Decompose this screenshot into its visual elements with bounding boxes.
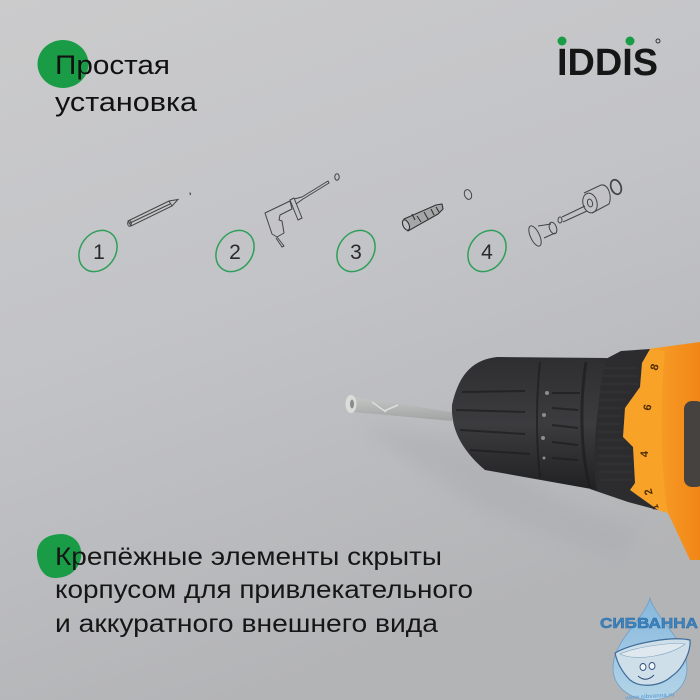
- title: [38, 40, 198, 117]
- chuck grooves: [456, 362, 590, 488]
- icon: wall plug: [401, 204, 443, 231]
- dial numbers: 2: [643, 487, 656, 496]
- dial numbers: [639, 363, 662, 511]
- photo: drill in wall: [346, 342, 700, 560]
- title: Простая: [55, 50, 170, 80]
- caption: [37, 534, 473, 638]
- step 3: wall plug: [329, 189, 473, 279]
- icon: pencil: [128, 200, 178, 226]
- drill bit: [346, 395, 452, 421]
- logo: IDDIS: IDDIS: [557, 42, 658, 84]
- step 4 number circle: 4: [481, 241, 493, 264]
- title green blob: [38, 40, 88, 88]
- caption: корпусом для привлекательного: [55, 576, 473, 604]
- step 1: pencil mark: [71, 192, 190, 279]
- caption: Крепёжные элементы скрыты: [55, 543, 442, 571]
- step 3 number circle: [329, 223, 383, 279]
- icon: fastener parts: [526, 178, 623, 248]
- water drop: [613, 598, 687, 700]
- watermark: Sibvanna: [600, 598, 698, 700]
- chuck highlights: [541, 391, 549, 460]
- brand name: СИБВАННА: [600, 615, 698, 632]
- collar ribs: [598, 368, 638, 480]
- bathtub: [615, 639, 690, 685]
- bathtub face: [638, 662, 655, 679]
- bathtub rim: [620, 644, 685, 657]
- step 2 number circle: 2: [229, 241, 241, 264]
- step 1 number circle: 1: [93, 241, 105, 264]
- dial numbers: 6: [642, 403, 654, 412]
- drill body: [648, 342, 700, 560]
- caption green blob: [37, 534, 81, 578]
- step 4: mounting: [460, 178, 623, 279]
- drill handle window: [684, 401, 700, 487]
- speed dial: [623, 349, 668, 513]
- icon: drill: [265, 174, 339, 247]
- step 4 number circle: [460, 223, 514, 279]
- icon: ring: [463, 189, 473, 200]
- drill shadow: [360, 425, 640, 560]
- dial numbers: 1: [650, 503, 661, 511]
- icon: pencil dot: [189, 192, 192, 195]
- collar: [590, 349, 658, 510]
- dial numbers: 4: [639, 450, 651, 457]
- chuck: [452, 357, 607, 490]
- caption: и аккуратного внешнего вида: [55, 610, 438, 638]
- step 2: drilling: [208, 174, 339, 279]
- dial numbers: 8: [649, 363, 662, 372]
- title: установка: [55, 87, 198, 117]
- step 3 number circle: 3: [350, 241, 362, 264]
